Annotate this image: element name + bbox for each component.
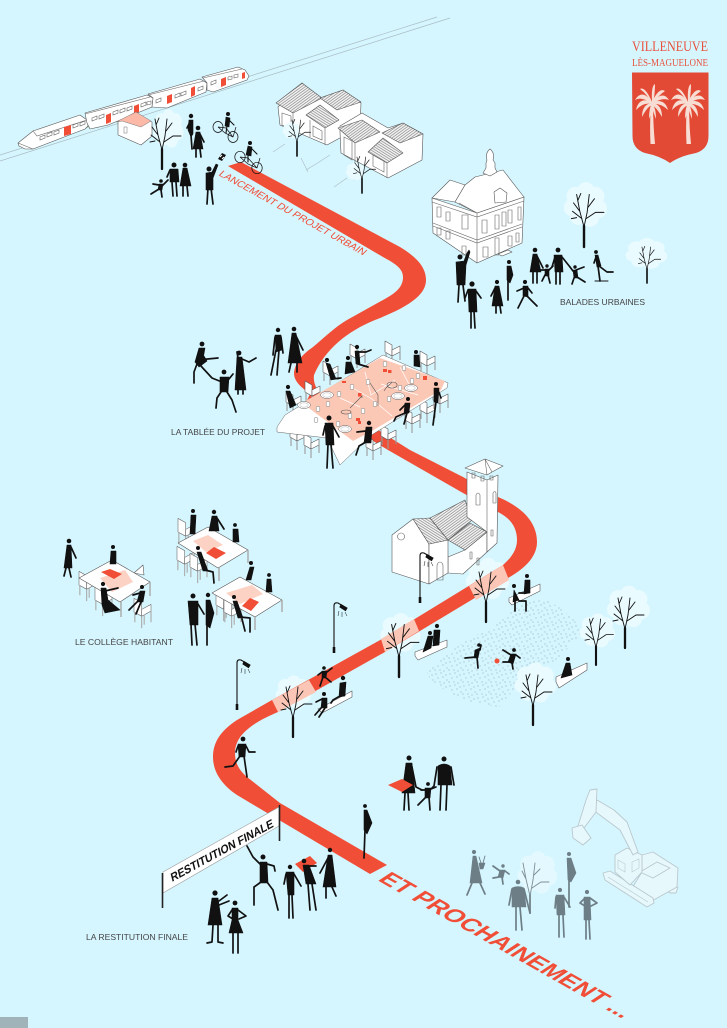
house group left bbox=[276, 83, 361, 145]
street lamps bbox=[237, 553, 433, 710]
table three seated bbox=[232, 561, 272, 632]
man bbox=[284, 865, 301, 918]
excavator bbox=[572, 789, 678, 907]
runner on curve bbox=[225, 737, 255, 777]
jumping man bbox=[247, 846, 278, 910]
road: middle and lower sections bbox=[213, 425, 537, 874]
people: in the park bbox=[225, 574, 572, 777]
lower wall bbox=[448, 532, 487, 574]
red map bbox=[388, 779, 413, 792]
skater bbox=[594, 250, 613, 281]
cyclist one bbox=[213, 112, 238, 142]
lamp: left bbox=[237, 660, 250, 710]
table one bbox=[79, 560, 151, 628]
woman left bbox=[286, 385, 296, 408]
man bbox=[432, 756, 454, 810]
cab bbox=[615, 848, 642, 885]
roofs bbox=[413, 518, 448, 544]
cyclist two bbox=[235, 141, 262, 174]
tablecloth bbox=[277, 355, 448, 465]
tree halos under the road bbox=[276, 558, 509, 709]
boom bbox=[593, 800, 638, 855]
label: et prochainement: ET PROCHAINEMENT ... bbox=[373, 868, 640, 1022]
logo: LÈS-MAGUELONE bbox=[632, 57, 708, 69]
bucket bbox=[572, 825, 591, 845]
palm trees bbox=[635, 84, 669, 144]
seated back row bbox=[325, 345, 420, 380]
logo bbox=[632, 39, 708, 163]
table one seated bbox=[101, 545, 145, 614]
tree: by houses right bbox=[346, 156, 376, 193]
scribbles on table bbox=[341, 382, 397, 414]
label: le college habitant: LE COLLÈGE HABITANT bbox=[75, 637, 173, 647]
small shadow lines by houses bbox=[273, 144, 347, 187]
tree: town hall large bbox=[564, 182, 607, 247]
woman with plant bbox=[467, 850, 485, 895]
woman with paper bbox=[302, 859, 316, 910]
man akimbo bbox=[580, 890, 597, 939]
coat man bbox=[207, 890, 229, 943]
people: restitution group bbox=[207, 804, 372, 953]
people: family with map bbox=[402, 756, 454, 810]
cyclists bbox=[213, 112, 262, 174]
woman walking bbox=[64, 539, 76, 577]
train carriage: fourth bbox=[202, 67, 249, 92]
tree grey bbox=[518, 851, 557, 913]
church bbox=[392, 459, 503, 584]
family walking bbox=[530, 248, 585, 284]
red markers bbox=[342, 369, 427, 424]
label: lancement du projet urbain: LANCEMENT DU PROJET URBAIN bbox=[216, 169, 369, 258]
red paper bbox=[295, 856, 317, 872]
engine body bbox=[632, 852, 678, 902]
banner: restitution finale bbox=[162, 805, 280, 908]
right track bbox=[665, 884, 678, 893]
label: balades urbaines: BALADES URBAINES bbox=[560, 297, 645, 307]
train carriage: second bbox=[85, 95, 153, 129]
windows bbox=[437, 207, 521, 257]
banner text: RESTITUTION FINALE bbox=[169, 817, 275, 885]
waving man bbox=[456, 250, 470, 302]
people: departure group bbox=[151, 114, 226, 204]
label: la tablee du projet: LA TABLÉE DU PROJET bbox=[171, 427, 265, 437]
logo text: VILLENEUVE bbox=[632, 39, 708, 55]
shield bbox=[632, 72, 708, 163]
benches bbox=[318, 584, 587, 713]
people: college bbox=[64, 509, 272, 645]
front gable bbox=[392, 519, 429, 584]
singer bbox=[235, 351, 256, 394]
lamp: church bbox=[420, 553, 433, 603]
table two bbox=[177, 518, 248, 583]
man bbox=[465, 281, 481, 328]
corner artefact bbox=[0, 1017, 28, 1028]
trees around the lawn bbox=[515, 586, 650, 725]
man with tree bbox=[509, 880, 530, 930]
thin man bbox=[507, 260, 513, 300]
left track bbox=[603, 871, 654, 907]
man hand on hip bbox=[555, 888, 570, 937]
tree: station bbox=[150, 109, 184, 169]
pale road sections bbox=[272, 565, 509, 712]
pair standing bbox=[188, 593, 214, 645]
thin man bbox=[567, 852, 576, 907]
tower roof bbox=[465, 459, 503, 475]
seated right bbox=[394, 397, 410, 424]
small station house bbox=[116, 112, 152, 145]
standing right bbox=[433, 382, 441, 425]
trees along the road bbox=[281, 571, 505, 737]
table top pink bbox=[302, 358, 445, 441]
people: future (grey) bbox=[467, 850, 597, 939]
couple bbox=[167, 162, 191, 196]
train carriage: head bbox=[18, 115, 88, 149]
houses bbox=[276, 83, 423, 178]
seated front bbox=[356, 421, 372, 455]
lamp: middle bbox=[334, 603, 347, 653]
train bbox=[18, 67, 249, 149]
bench figure lower bbox=[561, 657, 572, 678]
people: balades urbaines bbox=[456, 248, 613, 328]
runner bbox=[517, 280, 537, 308]
football players bbox=[465, 643, 520, 669]
railway tracks bbox=[0, 17, 450, 161]
college tables bbox=[79, 518, 282, 630]
woman akimbo bbox=[228, 901, 246, 953]
child bbox=[418, 782, 436, 810]
dancer bbox=[216, 370, 236, 412]
football bbox=[494, 658, 500, 664]
guitarist bbox=[194, 342, 222, 383]
label: la restitution finale: LA RESTITUTION FINALE bbox=[86, 932, 188, 942]
house group right bbox=[338, 113, 423, 178]
woman in dress bbox=[320, 848, 336, 898]
tree: by houses bbox=[283, 119, 311, 156]
couple near road bbox=[271, 327, 303, 375]
stick bbox=[578, 789, 597, 828]
banner posts bbox=[162, 805, 280, 908]
bench figures middle bbox=[423, 624, 440, 652]
runner on road middle bbox=[318, 666, 332, 686]
people: seated around table bbox=[286, 345, 441, 468]
bench figures right bbox=[512, 574, 530, 611]
train carriage: third bbox=[148, 79, 207, 108]
tall thin man bbox=[363, 804, 372, 858]
lawn stipple bbox=[427, 600, 582, 707]
child jumping bbox=[493, 864, 509, 884]
chairs around table bbox=[286, 341, 448, 460]
standing front bbox=[323, 416, 339, 468]
town hall bbox=[432, 149, 524, 263]
woman bbox=[491, 280, 503, 313]
tree: town hall small bbox=[626, 238, 667, 283]
bench figures left bbox=[315, 676, 346, 717]
child bbox=[151, 179, 168, 197]
side wall bbox=[429, 540, 448, 584]
table two seated bbox=[190, 509, 239, 583]
road bbox=[228, 162, 426, 420]
table three bbox=[212, 577, 282, 630]
thin man bbox=[187, 114, 193, 149]
turret bbox=[483, 149, 497, 176]
banquet table bbox=[277, 341, 448, 465]
woman in dress bbox=[193, 126, 204, 157]
people: music group bbox=[194, 327, 303, 412]
flag waver bbox=[206, 153, 226, 204]
tower bbox=[467, 472, 498, 552]
place settings bbox=[298, 362, 427, 432]
woman bbox=[402, 756, 422, 810]
